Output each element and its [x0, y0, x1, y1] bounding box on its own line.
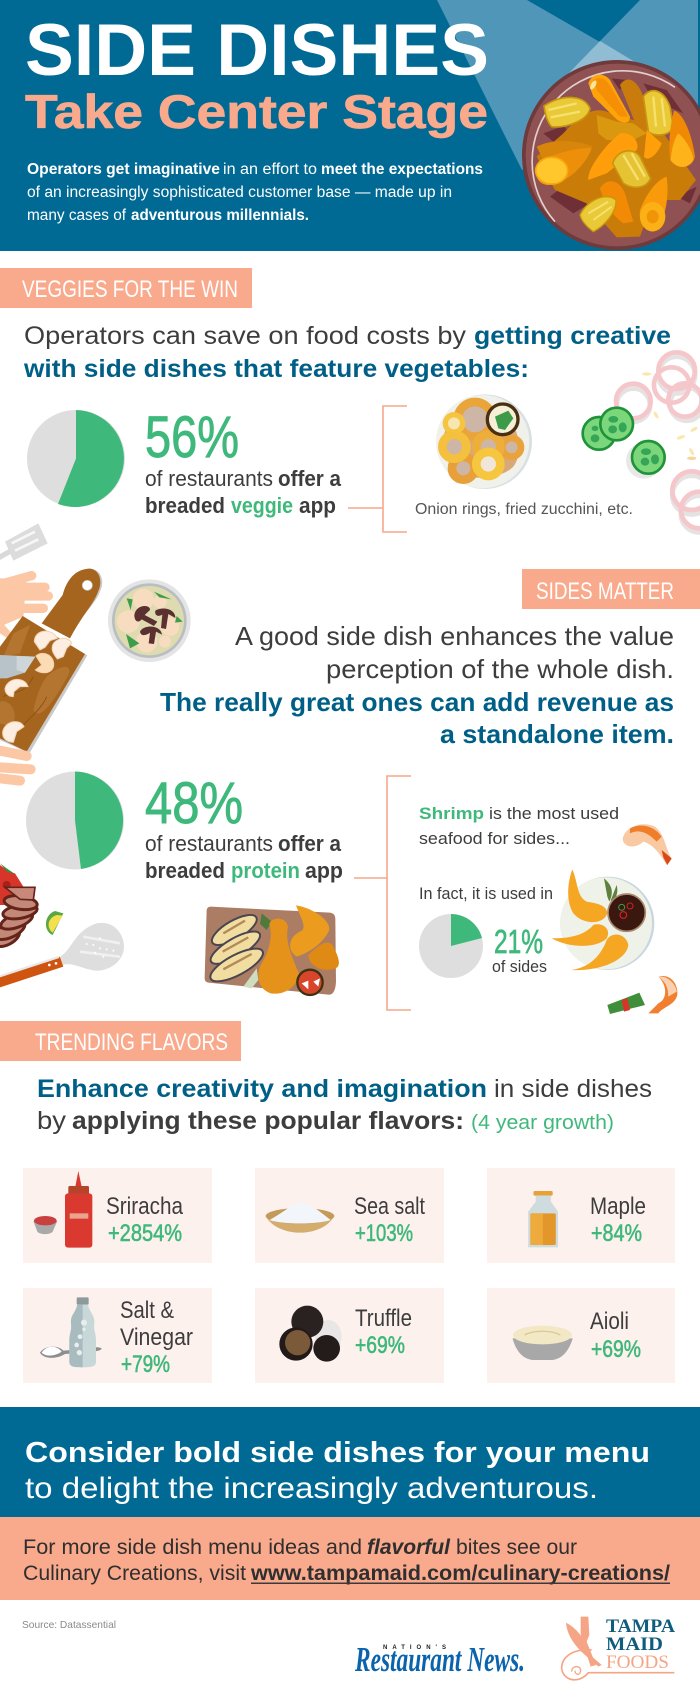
panel: coral link band: flavorful — [367, 1536, 451, 1559]
card: salt and vinegar: Salt & — [120, 1297, 174, 1324]
icon: top hand — [0, 576, 48, 641]
heading: veggies: with side dishes that feature vegetables: — [23, 355, 529, 383]
text block: shrimp note: In fact, it is used in — [419, 884, 553, 903]
logo: nation's restaurant news: NATION'S — [383, 1645, 446, 1651]
bracket connector: veggie — [348, 406, 407, 532]
stat: 48 percent: protein — [231, 858, 300, 883]
intro text block: in an effort to — [223, 161, 317, 178]
icons: shrimp illustrations — [552, 824, 677, 1014]
stat: 56 percent: app — [299, 493, 336, 518]
card: aioli: Aioli — [590, 1308, 629, 1335]
stat: 56 percent: breaded — [145, 493, 225, 518]
panel: blue call to action — [0, 1407, 700, 1517]
logo: nation's restaurant news: Restaurant News. — [354, 1640, 525, 1679]
icon: scattered onion rings and cucumbers — [583, 352, 700, 532]
spotlight beams — [437, 0, 698, 170]
stat: 21 percent: 21% — [494, 923, 543, 960]
subtitle: take center stage: Take Center Stage — [25, 85, 488, 138]
section tag: veggies for the win: VEGGIES FOR THE WIN — [22, 276, 238, 303]
intro text block: meet the expectations — [321, 161, 483, 178]
heading: trending flavors: applying these popular flavors: — [72, 1107, 464, 1135]
icon: mushrooms — [3, 631, 72, 742]
panel: coral link band: Culinary Creations, visit — [23, 1562, 246, 1585]
icon: slotted spoon — [0, 923, 124, 987]
heading: sides matter: The really great ones can add revenue as — [160, 687, 674, 717]
stat: 56 percent: offer a — [278, 466, 342, 491]
stat: 56 percent: veggie — [231, 493, 293, 518]
icon: slotted spatula — [0, 523, 48, 561]
icon: plate of fried shrimp — [552, 869, 654, 970]
stat: 48 percent: breaded — [145, 858, 225, 883]
card: salt and vinegar: +79% — [121, 1351, 170, 1378]
icon: sliced meat — [0, 887, 38, 950]
text block: shrimp note — [419, 804, 619, 903]
intro text block: of an increasingly sophisticated customer base — made up in — [27, 184, 452, 201]
icon: vinegar bottle and salt spoon — [40, 1297, 102, 1367]
card: truffle — [255, 1288, 444, 1383]
caption: onion rings: Onion rings, fried zucchini, etc. — [415, 501, 633, 518]
bracket connector: protein — [354, 776, 411, 1010]
text block: shrimp note: seafood for sides... — [419, 829, 570, 848]
icon: tomato, sliced meat, lime and slotted spoon — [0, 863, 124, 987]
stat: 21 percent — [492, 923, 547, 976]
panel: blue call to action: to delight the increasingly adventurous. — [25, 1472, 598, 1505]
card: salt and vinegar — [23, 1288, 212, 1383]
panel: coral link band: bites see our — [456, 1536, 577, 1559]
section tag: trending flavors: TRENDING FLAVORS — [35, 1029, 228, 1056]
stat: 56 percent — [145, 405, 342, 518]
stat: 48 percent: of restaurants — [145, 831, 273, 856]
icon: bowl of sea salt — [266, 1203, 334, 1233]
stat: 48 percent — [145, 771, 343, 883]
card: maple — [487, 1168, 675, 1263]
heading: veggies — [23, 322, 671, 383]
source note: Source: Datassential — [22, 1619, 116, 1631]
heading: sides matter: perception of the whole dish. — [326, 654, 674, 684]
icon: cutting board — [0, 569, 102, 753]
icon: raw shrimp — [623, 824, 672, 865]
panel: coral link band — [0, 1517, 700, 1600]
icon: green bundle and small shrimp — [607, 976, 677, 1014]
card: aioli — [487, 1288, 675, 1383]
title: side dishes: SIDE DISHES — [25, 10, 489, 91]
icon: plate of onion rings — [436, 394, 532, 489]
card: sriracha: +2854% — [108, 1220, 182, 1247]
intro text block: Operators get imaginative — [27, 161, 220, 178]
icon: lower hand — [0, 751, 31, 781]
card: aioli: +69% — [591, 1336, 641, 1363]
text block: shrimp note: Shrimp — [419, 804, 484, 823]
icon: plate of fried vegetables — [522, 60, 700, 250]
card: maple: +84% — [591, 1220, 642, 1247]
panel: coral link band: For more side dish menu ideas and — [23, 1536, 362, 1559]
section tag: trending flavors — [0, 1021, 241, 1061]
heading: veggies: Operators can save on food costs by — [24, 322, 467, 350]
heading: trending flavors: Enhance creativity and imagination — [37, 1075, 487, 1103]
stat: 56 percent: of restaurants — [145, 466, 273, 491]
heading: trending flavors: by — [37, 1107, 67, 1135]
icon: grey spatula and cutting board with mushrooms — [0, 523, 102, 781]
stat: 48 percent: offer a — [278, 831, 342, 856]
card: salt and vinegar: Vinegar — [120, 1324, 193, 1351]
stat: 48 percent: app — [305, 858, 343, 883]
pie chart: 21 percent — [419, 914, 483, 978]
icon: bowl of aioli — [513, 1326, 573, 1360]
icon: soup bowl with mushrooms — [108, 579, 191, 662]
intro text block: adventurous millennials. — [131, 207, 309, 224]
icon: maple syrup bottle — [528, 1191, 558, 1247]
logo: tampa maid foods: TAMPA — [606, 1616, 675, 1637]
card: truffle: +69% — [355, 1332, 405, 1359]
heading: sides matter: A good side dish enhances the value — [235, 621, 674, 651]
logo: tampa maid foods: FOODS — [606, 1652, 669, 1673]
card: sea salt — [255, 1168, 444, 1263]
heading: veggies: getting creative — [474, 322, 671, 350]
intro text block — [27, 161, 483, 224]
icon: lime wedge — [46, 911, 63, 935]
panel: coral link band: www.tampamaid.com/culinary-creations/ — [250, 1562, 670, 1585]
card: sriracha — [23, 1168, 212, 1263]
heading: trending flavors — [37, 1075, 652, 1135]
heading: sides matter — [160, 621, 674, 749]
text block: shrimp note: is the most used — [489, 804, 619, 823]
card: maple: Maple — [590, 1193, 646, 1220]
panel: blue call to action: Consider bold side dishes for your menu — [25, 1437, 650, 1469]
icon: truffles — [279, 1306, 342, 1362]
icon: sriracha bottle and bowl — [33, 1171, 92, 1248]
logo: tampa maid foods: MAID — [606, 1634, 663, 1655]
icon: platter with eggplant and fried chicken — [205, 905, 339, 995]
section tag: sides matter — [522, 569, 700, 609]
card: sriracha: Sriracha — [106, 1193, 184, 1220]
pie chart: 48 percent — [26, 772, 124, 870]
heading: sides matter: a standalone item. — [440, 719, 674, 749]
pie chart: 56 percent — [27, 410, 125, 507]
card: sea salt: +103% — [355, 1220, 413, 1247]
heading: trending flavors: in side dishes — [494, 1075, 652, 1103]
icon: tomato — [0, 863, 23, 905]
logo: nation's restaurant news — [354, 1640, 525, 1679]
stat: 56 percent: 56% — [145, 405, 239, 470]
card: sea salt: Sea salt — [354, 1193, 425, 1220]
card: truffle: Truffle — [355, 1305, 412, 1332]
section tag: veggies for the win — [0, 268, 252, 308]
heading: trending flavors: (4 year growth) — [471, 1112, 614, 1134]
intro text block: many cases of — [27, 207, 127, 224]
stat: 21 percent: of sides — [492, 957, 547, 976]
logo: tampa maid foods — [562, 1616, 675, 1680]
panel: header banner — [0, 0, 700, 251]
stat: 48 percent: 48% — [145, 771, 243, 836]
